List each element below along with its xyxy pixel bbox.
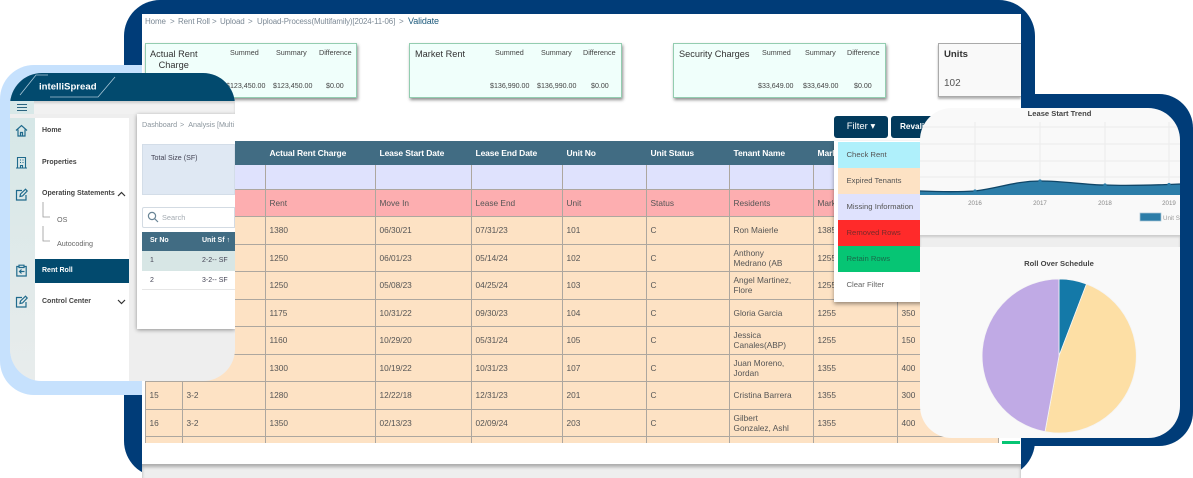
rent roll table: Anthony — [734, 248, 764, 258]
rent roll table: 07/31/23 — [476, 225, 508, 235]
filter button — [834, 116, 888, 138]
nav: rent roll active: Rent Roll — [42, 267, 73, 274]
breadcrumb: Upload — [220, 17, 245, 26]
rent roll table: Actual Rent Charge — [270, 148, 346, 158]
nav: control center: Control Center — [42, 298, 91, 305]
mini table row 2 — [142, 271, 235, 290]
main window navy frame — [124, 0, 1035, 477]
icon: clipboard — [16, 264, 27, 277]
filter dropdown — [834, 141, 924, 302]
summary card: security charges: Difference — [847, 48, 880, 57]
nav: home: Home — [42, 127, 61, 134]
mini table row 1: 2-2-- SF — [202, 257, 228, 264]
icon: home — [16, 124, 28, 137]
lease start trend chart — [920, 109, 1180, 222]
mini table row 2: 3-2-- SF — [202, 277, 228, 284]
area series — [920, 181, 1180, 195]
rent roll table: Gloria Garcia — [734, 308, 782, 318]
rent roll table: Residents — [734, 198, 770, 208]
rent roll table: 02/13/23 — [380, 418, 412, 428]
rent roll table: Tenant Name — [734, 148, 785, 158]
summary card: units — [938, 43, 1021, 97]
rent roll table: 10/31/22 — [380, 308, 412, 318]
x axis labels: 2018 — [1098, 200, 1112, 207]
rent roll table: C — [650, 308, 656, 318]
nav: rent roll active — [35, 259, 128, 283]
summary card: market rent: $136,990.00 — [537, 82, 576, 90]
summary card: units: 102 — [944, 78, 961, 89]
rent roll table: 1250 — [270, 280, 288, 290]
rent roll table: 1255 — [818, 280, 836, 290]
breadcrumb: Home — [145, 17, 166, 26]
x axis labels: 2017 — [1033, 200, 1047, 207]
rent roll table: 150 — [902, 335, 915, 345]
rent roll table: Move In — [380, 198, 409, 208]
breadcrumb separator and analysis: > Analysis [Multi — [180, 120, 234, 129]
summary card: market rent: $136,990.00 — [490, 82, 529, 90]
page bottom grey strip — [142, 464, 1021, 478]
item: expired tenants: Expired Tenants — [846, 176, 902, 185]
revalidate button — [891, 116, 936, 138]
rent roll table: 1355 — [818, 363, 836, 373]
rent roll table: 04/25/24 — [476, 280, 508, 290]
item: clear filter — [838, 272, 924, 298]
rent roll table: 101 — [566, 225, 580, 235]
sidebar window light blue frame — [0, 65, 200, 395]
rent roll table: Angel Martinez, — [734, 275, 791, 285]
total size box: Total Size (SF) — [151, 154, 198, 162]
rent roll table: Lease End Date — [476, 148, 537, 158]
rent roll table: 05/31/24 — [476, 335, 508, 345]
summary card: security charges: $33,649.00 — [803, 82, 839, 90]
search box — [142, 207, 235, 228]
rent roll table: 350 — [902, 308, 915, 318]
summary card: security charges: $0.00 — [854, 82, 872, 90]
rent roll table: 107 — [566, 363, 580, 373]
breadcrumb dashboard: Dashboard — [142, 120, 177, 129]
rent roll table: 1385 — [818, 225, 836, 235]
logo: intelliSpread — [39, 82, 97, 92]
nav: operating statements: Operating Statements — [42, 190, 115, 197]
rent roll table: 1250 — [270, 253, 288, 263]
summary card: security charges: Security Charges — [679, 49, 749, 59]
summary card: security charges: $33,649.00 — [758, 82, 794, 90]
rent roll table: 201 — [566, 390, 580, 400]
green action button edge — [1002, 441, 1020, 444]
rent roll table: 400 — [902, 363, 915, 373]
x axis labels — [968, 200, 1176, 207]
rent roll table: C — [650, 253, 656, 263]
mini table — [142, 232, 235, 290]
top toolbar band — [10, 101, 235, 114]
rent roll table: Gonzalez, Ashl — [734, 423, 789, 433]
rent roll table: 1255 — [818, 335, 836, 345]
sidebar application window — [10, 73, 235, 381]
hamburger icon — [10, 101, 34, 114]
rent roll table: 15 — [150, 390, 159, 400]
rent roll table: Jessica — [734, 330, 761, 340]
rent roll table: Status — [650, 198, 674, 208]
item: expired tenants — [838, 168, 924, 194]
legend — [1140, 213, 1161, 221]
navigation menu — [35, 118, 128, 381]
pie title: Roll Over Schedule — [1024, 259, 1094, 268]
tree connectors — [42, 202, 50, 242]
filter button: Filter ▾ — [847, 121, 875, 132]
breadcrumb — [145, 16, 439, 26]
analysis content card — [137, 114, 235, 329]
rent roll table: C — [650, 390, 656, 400]
chevron down — [118, 300, 126, 304]
item: clear filter: Clear Filter — [846, 280, 884, 289]
rent roll table: 1255 — [818, 253, 836, 263]
icon: edit — [16, 188, 28, 201]
rent roll table: 1300 — [270, 363, 288, 373]
rent roll table: Ron Maierle — [734, 225, 778, 235]
rent roll table: Market Rent — [818, 148, 865, 158]
rent roll table: 1355 — [818, 418, 836, 428]
rent roll table: 06/30/21 — [380, 225, 412, 235]
item: missing information — [838, 194, 924, 220]
rent roll table: Lease End — [476, 198, 515, 208]
icon: building — [16, 157, 27, 168]
rent roll table: 105 — [566, 335, 580, 345]
rent roll table: 102 — [566, 253, 580, 263]
rent roll table: 10/19/22 — [380, 363, 412, 373]
item: removed rows: Removed Rows — [846, 228, 901, 237]
rent roll table: 104 — [566, 308, 580, 318]
summary card: actual rent charge: Difference — [319, 48, 352, 57]
x axis labels: 2016 — [968, 200, 982, 207]
nav: properties: Properties — [42, 159, 77, 166]
rent roll table: C — [650, 335, 656, 345]
rent roll table: 10/29/20 — [380, 335, 412, 345]
rent roll table: C — [650, 363, 656, 373]
rent roll table: 300 — [902, 390, 915, 400]
rent roll table: 1255 — [818, 308, 836, 318]
rent roll table: 12/31/23 — [476, 390, 508, 400]
rent roll table: Gilbert — [734, 413, 758, 423]
summary card: security charges: Summed — [762, 48, 791, 57]
icon rail — [10, 118, 35, 381]
summary card: security charges: Summary — [805, 48, 836, 57]
item: check rent: Check Rent — [846, 150, 887, 159]
app header — [10, 73, 235, 101]
x axis labels: 2019 — [1162, 200, 1176, 207]
rent roll table: Cristina Barrera — [734, 390, 792, 400]
mini table row 1 — [142, 251, 235, 271]
summary card: actual rent charge: Charge — [159, 60, 189, 70]
rent roll table: 12/22/18 — [380, 390, 412, 400]
rent roll table: Medrano (AB — [734, 258, 782, 268]
summary card: actual rent charge: $123,450.00 — [226, 82, 265, 90]
rent roll table: 10/31/23 — [476, 363, 508, 373]
summary card: actual rent charge: Actual Rent — [150, 49, 198, 59]
rent roll table: 1355 — [818, 390, 836, 400]
rent roll table: Unit Status — [650, 148, 694, 158]
rent roll table: Canales(ABP) — [734, 340, 786, 350]
breadcrumb: > — [212, 17, 217, 26]
summary card: units: Units — [944, 49, 968, 60]
summary card: security charges — [673, 43, 886, 98]
chart title: Lease Start Trend — [1028, 109, 1092, 118]
breadcrumb: > — [399, 17, 404, 26]
rent roll table: 1160 — [270, 335, 287, 345]
mini table header: Unit Sf ↑ — [202, 237, 230, 244]
charts window navy frame — [1021, 94, 1193, 446]
summary card: market rent: Summed — [495, 48, 524, 57]
rent roll table: 02/09/24 — [476, 418, 508, 428]
rent roll table: Lease Start Date — [380, 148, 444, 158]
item: missing information: Missing Information — [846, 202, 913, 211]
mini table row 2: 2 — [150, 277, 154, 284]
rent roll table: 3-2 — [186, 390, 198, 400]
summary card: actual rent charge — [145, 43, 357, 98]
rent roll table — [145, 141, 999, 443]
rent roll table: Juan Moreno, — [734, 358, 784, 368]
total size box — [142, 144, 235, 195]
rent roll table: 1380 — [270, 225, 288, 235]
breadcrumb: Rent Roll — [178, 17, 210, 26]
mini table header: Sr No — [150, 237, 169, 244]
breadcrumb: > — [170, 17, 175, 26]
summary card: actual rent charge: Summed — [230, 48, 259, 57]
summary card: actual rent charge: Summary — [276, 48, 307, 57]
search box: Search — [162, 213, 185, 222]
pie slice yellow — [1045, 284, 1136, 433]
nav: autocoding: Autocoding — [57, 239, 93, 248]
charts panel — [920, 108, 1180, 438]
nav: os: OS — [57, 215, 67, 224]
rent roll table: 16 — [150, 418, 159, 428]
mini table header — [142, 232, 235, 251]
rent roll table: 09/30/23 — [476, 308, 508, 318]
rent roll table: C — [650, 225, 656, 235]
rent roll table: Unit — [566, 198, 581, 208]
rent roll table: Jordan — [734, 368, 759, 378]
summary card: market rent: Summary — [541, 48, 572, 57]
rent roll table: Flore — [734, 285, 752, 295]
main window panel — [142, 14, 1021, 478]
summary card: market rent: Market Rent — [415, 49, 465, 59]
rent roll table: C — [650, 418, 656, 428]
pie slice purple — [982, 279, 1059, 432]
item: removed rows — [838, 220, 924, 246]
rent roll table: 3-2 — [186, 418, 198, 428]
item: retain rows: Retain Rows — [846, 254, 890, 263]
rent roll table: Unit No — [566, 148, 596, 158]
rent roll table: 203 — [566, 418, 580, 428]
rent roll table: 400 — [902, 418, 915, 428]
logo — [20, 74, 116, 98]
rent roll table: C — [650, 280, 656, 290]
mini table row 1: 1 — [150, 257, 154, 264]
divider band — [920, 235, 1180, 247]
chevron up — [118, 192, 126, 196]
rent roll table: 103 — [566, 280, 580, 290]
roll over schedule pie — [982, 259, 1136, 433]
rent roll table: 1350 — [270, 418, 288, 428]
rent roll table: 05/14/24 — [476, 253, 508, 263]
summary card: market rent: Difference — [583, 48, 616, 57]
rent roll table: Rent — [270, 198, 287, 208]
summary card: market rent: $0.00 — [591, 82, 609, 90]
pie slice blue — [1059, 279, 1086, 356]
rent roll table: 06/01/23 — [380, 253, 412, 263]
breadcrumb: Validate — [408, 16, 439, 26]
summary card: actual rent charge: $0.00 — [326, 82, 344, 90]
breadcrumb: Upload-Process(Multifamily)[2024-11-06] — [257, 17, 395, 26]
icon: edit control center — [16, 295, 28, 308]
item: check rent — [838, 142, 924, 168]
breadcrumb: > — [248, 17, 253, 26]
rent roll table: 05/08/23 — [380, 280, 412, 290]
summary card: actual rent charge: $123,450.00 — [273, 82, 312, 90]
item: retain rows — [838, 246, 924, 272]
rent roll table: 1175 — [270, 308, 287, 318]
rent roll table: Market — [818, 198, 843, 208]
rent roll table: 1280 — [270, 390, 288, 400]
summary card: market rent — [409, 43, 622, 98]
